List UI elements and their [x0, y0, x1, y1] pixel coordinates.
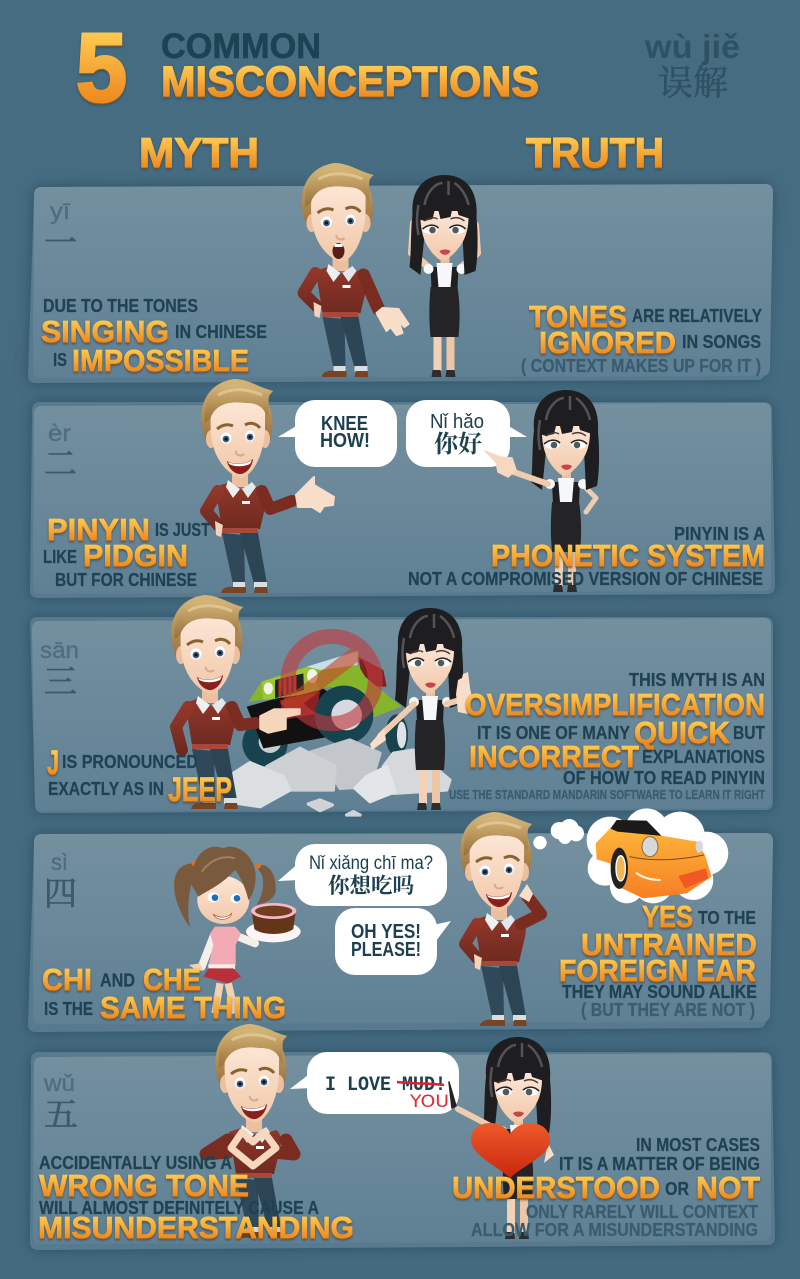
truth text: ALLOW FOR A MISUNDERSTANDING: [471, 1219, 758, 1240]
myth text: SINGING: [41, 314, 169, 349]
myth text: IS: [53, 349, 67, 370]
myth heading: MYTH: [139, 129, 259, 176]
truth text: UNTRAINED: [581, 927, 757, 962]
truth text: ( CONTEXT MAKES UP FOR IT ): [521, 355, 761, 376]
myth text: CHE: [143, 962, 201, 997]
truth text: TO THE: [698, 907, 756, 928]
truth text: FOREIGN EAR: [559, 953, 756, 988]
myth text: [38, 1152, 354, 1245]
panel: myth three: [30, 595, 773, 815]
myth text: BUT FOR CHINESE: [55, 569, 197, 590]
truth text: IN MOST CASES: [636, 1134, 760, 1155]
hand with pen: [449, 1082, 456, 1108]
character: woman pointing: [508, 390, 599, 592]
truth text: IGNORED: [539, 325, 676, 360]
character: man presenting: [201, 379, 334, 593]
character: woman with heart: [458, 1037, 554, 1239]
truth text: IT IS A MATTER OF BEING: [559, 1153, 760, 1174]
speech bubble: ni xiang chi ma: Nǐ xiǎng chī ma?: [309, 853, 433, 874]
panel: myth four: [28, 808, 773, 1032]
truth text: OR: [665, 1178, 689, 1199]
number label: 五: [44, 1089, 78, 1136]
hand: pointing: [485, 451, 516, 477]
truth text: [408, 523, 765, 589]
number label: sān: [40, 637, 79, 663]
myth text: [42, 962, 286, 1025]
myth text: IN CHINESE: [175, 321, 267, 342]
character: man pointing: [171, 595, 300, 809]
speech bubble: oh yes please: OH YES!: [351, 921, 421, 943]
truth text: THIS MYTH IS AN: [629, 669, 765, 690]
truth text: ( BUT THEY ARE NOT ): [581, 999, 755, 1020]
truth text: BUT: [733, 722, 766, 743]
panel: myth one: [28, 163, 773, 383]
truth text: [449, 669, 766, 802]
number label: yī: [50, 198, 71, 224]
truth text: OVERSIMPLIFICATION: [465, 687, 765, 722]
truth text: YES: [642, 899, 693, 934]
truth text: [452, 1134, 760, 1240]
number label: 二: [44, 438, 77, 485]
speech bubble: knee how: HOW!: [320, 430, 370, 452]
myth text: IS JUST: [155, 519, 211, 540]
numeral 5: 5: [76, 13, 127, 122]
icon: heart: [471, 1123, 550, 1178]
myth text: IMPOSSIBLE: [72, 343, 249, 378]
myth text: DUE TO THE TONES: [43, 295, 198, 316]
speech bubble: oh yes please: PLEASE!: [351, 939, 421, 961]
number label: [40, 637, 79, 703]
myth text: AND: [100, 970, 135, 990]
speech bubble: ni hao: [406, 400, 527, 467]
number label: sì: [51, 849, 68, 875]
speech bubble: i love mud: [290, 1052, 459, 1114]
speech bubble: ni xiang chi ma: [278, 844, 447, 906]
truth text: QUICK: [634, 715, 731, 750]
myth text: PIDGIN: [83, 538, 188, 573]
speech bubble: knee how: KNEE: [321, 413, 368, 435]
myth text: J: [47, 744, 59, 782]
truth text: [559, 899, 757, 1020]
common: COMMON: [161, 27, 321, 66]
truth text: IN SONGS: [682, 331, 761, 352]
truth text: EXPLANATIONS: [642, 746, 765, 767]
panel: myth five: [30, 1024, 775, 1250]
number label: wǔ: [43, 1070, 75, 1096]
myth text: JEEP: [168, 771, 232, 809]
chinese term: [644, 28, 740, 106]
character: girl with cake: [174, 847, 301, 1013]
cake: [246, 903, 301, 942]
misconceptions: MISCONCEPTIONS: [161, 58, 539, 106]
speech bubble: ni hao: Nǐ hǎo: [430, 411, 484, 433]
myth text: EXACTLY AS IN: [48, 778, 164, 799]
character: man surprised: [302, 163, 408, 377]
number label: 三: [44, 656, 77, 703]
number label: 四: [44, 868, 77, 915]
speech bubble: ni hao: 你好: [434, 424, 482, 459]
illustration: jeep on rocks: [228, 636, 450, 815]
myth text: CHI: [42, 962, 92, 997]
myth text: WRONG TONE: [39, 1168, 249, 1203]
character: man making heart: [206, 1024, 294, 1238]
number label: èr: [48, 420, 71, 446]
thought dots: [533, 819, 584, 849]
truth text: THEY MAY SOUND ALIKE: [562, 981, 757, 1002]
truth text: IT IS ONE OF MANY: [477, 722, 631, 743]
jeep: [242, 651, 408, 766]
speech bubble: i love mud: YOU: [409, 1092, 449, 1112]
prohibition sign: [285, 636, 375, 724]
myth text: LIKE: [43, 546, 77, 567]
number label: [43, 1070, 78, 1136]
myth text: [47, 744, 232, 809]
myth text: [43, 512, 211, 590]
myth text: PINYIN: [47, 512, 150, 547]
thought bubble with car: [533, 808, 728, 903]
rocks: [228, 740, 450, 815]
speech bubble: i love mud: I LOVE MUD!: [325, 1074, 446, 1097]
pinyin term: wù jiě: [644, 28, 740, 65]
speech bubble: ni xiang chi ma: 你想吃吗: [328, 869, 415, 900]
truth text: [521, 299, 763, 376]
myth text: WILL ALMOST DEFINITELY CAUSE A: [39, 1197, 319, 1218]
truth text: TONES: [529, 299, 627, 334]
hanzi term: 误解: [658, 56, 728, 106]
character: woman stop gesture: [370, 608, 472, 810]
myth text: [41, 295, 267, 378]
myth text: IS THE: [44, 998, 93, 1019]
character: woman covering ears: [410, 175, 478, 377]
speech bubble: oh yes please: [335, 908, 451, 975]
truth text: ARE RELATIVELY: [632, 305, 763, 326]
cloud: [587, 808, 728, 903]
panel: myth two: [30, 379, 775, 598]
speech bubble: knee how: [278, 400, 397, 467]
truth text: NOT: [696, 1170, 760, 1205]
myth text: SAME THING: [100, 990, 286, 1025]
myth text: ACCIDENTALLY USING A: [39, 1152, 232, 1173]
truth text: INCORRECT: [469, 739, 639, 774]
number label: 一: [44, 217, 77, 264]
truth text: PINYIN IS A: [674, 523, 765, 544]
truth heading: TRUTH: [526, 129, 664, 176]
car: [596, 820, 712, 898]
truth text: UNDERSTOOD: [452, 1170, 660, 1205]
myth text: MISUNDERSTANDING: [38, 1210, 354, 1245]
truth text: PHONETIC SYSTEM: [491, 538, 765, 573]
title: [76, 13, 539, 122]
truth text: OF HOW TO READ PINYIN: [563, 767, 765, 788]
character: man thinking: [460, 812, 541, 1026]
myth text: IS PRONOUNCED: [62, 751, 198, 772]
truth text: ONLY RARELY WILL CONTEXT: [526, 1201, 759, 1222]
